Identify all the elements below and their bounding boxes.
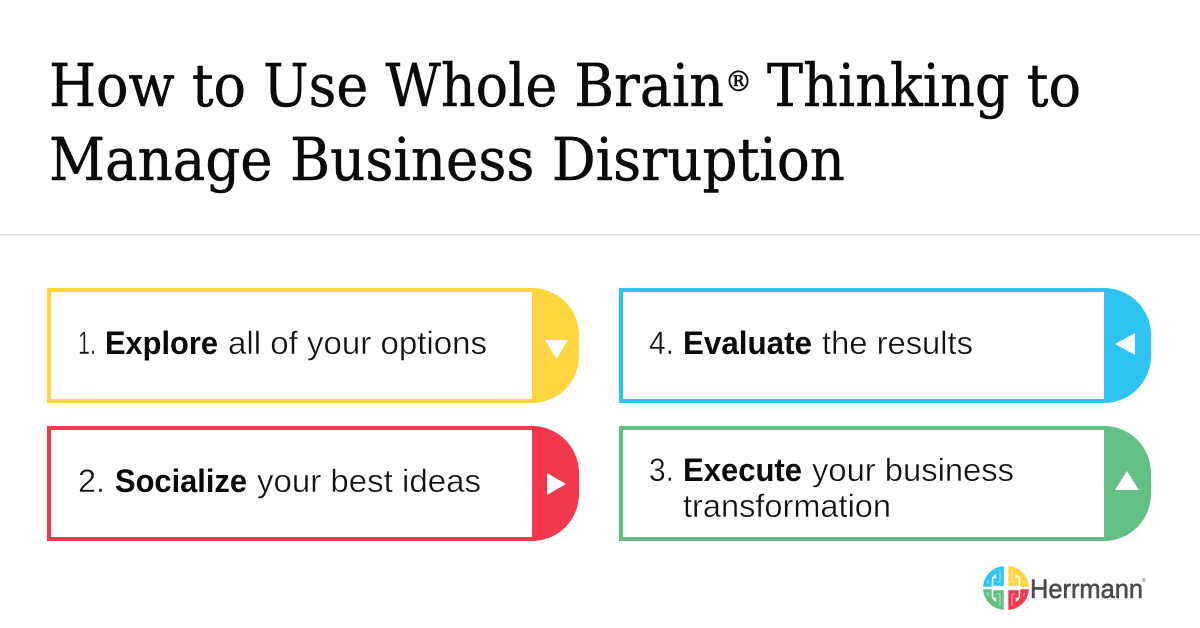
step 3 text: transformation bbox=[683, 488, 891, 524]
icon: up arrow bbox=[1115, 471, 1139, 490]
step 3 text: Execute bbox=[683, 452, 802, 488]
panel: step 4 evaluate bbox=[621, 288, 1151, 403]
tab: yellow bbox=[532, 288, 579, 403]
title: Manage Business Disruption bbox=[49, 125, 845, 194]
step 2 text bbox=[78, 463, 481, 499]
tab: green bbox=[1104, 426, 1151, 541]
step 2 text: 2. bbox=[78, 463, 105, 499]
step 2 text: Socialize bbox=[115, 463, 247, 499]
icon: right arrow bbox=[547, 473, 566, 495]
step 3 text: your business bbox=[812, 452, 1014, 488]
step 4 text bbox=[649, 325, 973, 361]
panel: step 3 execute bbox=[621, 426, 1151, 541]
step 1 text: Explore bbox=[105, 325, 218, 361]
icon: down arrow bbox=[545, 340, 568, 359]
panel: step 2 socialize bbox=[49, 426, 579, 541]
step 2 text: your best ideas bbox=[257, 463, 481, 499]
step 4 text: the results bbox=[822, 325, 973, 361]
tab: red bbox=[532, 426, 579, 541]
step 1 text: 1. bbox=[78, 325, 96, 361]
step 3 text: 3. bbox=[649, 452, 674, 488]
title bbox=[49, 51, 1081, 194]
wordmark: ® bbox=[1142, 577, 1146, 584]
icon: knot mark bbox=[985, 568, 1027, 608]
panel: step 1 explore bbox=[49, 288, 579, 403]
step 3 text bbox=[649, 452, 1014, 524]
logo: Herrmann bbox=[985, 568, 1146, 608]
wordmark: Herrmann bbox=[1030, 574, 1143, 604]
tab: blue bbox=[1104, 288, 1151, 403]
step 1 text bbox=[78, 325, 487, 361]
title: Thinking to bbox=[767, 51, 1081, 120]
step 1 text: all of your options bbox=[228, 325, 487, 361]
step 4 text: Evaluate bbox=[683, 325, 812, 361]
step 4 text: 4. bbox=[649, 325, 674, 361]
icon: left arrow bbox=[1115, 333, 1135, 355]
title: How to Use Whole Brain bbox=[49, 51, 724, 120]
title: ® bbox=[725, 65, 752, 98]
